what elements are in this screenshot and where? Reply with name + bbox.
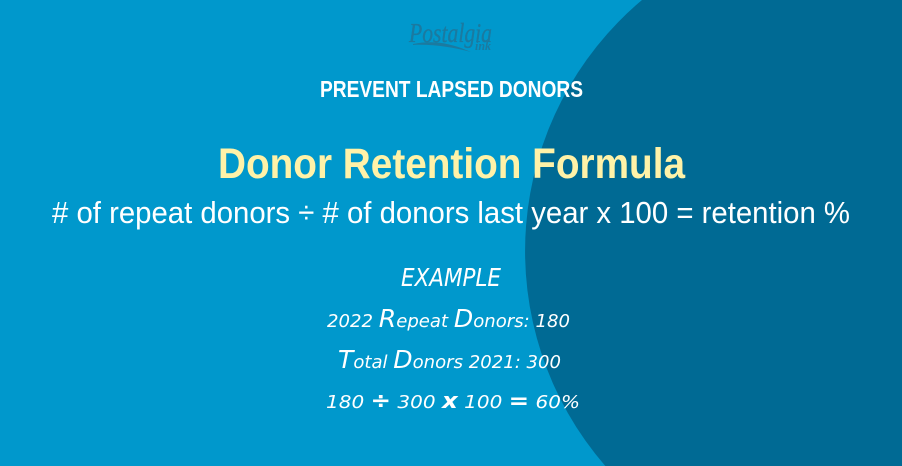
logo: Postalgia ink: ink <box>475 38 491 53</box>
example block <box>326 263 580 414</box>
example line: total donors: Total Donors 2021: 300 <box>338 345 561 374</box>
title: donor retention formula: Donor Retention Formula <box>218 140 686 188</box>
formula text: # of repeat donors ÷ # of donors last year x 100 = retention % <box>52 195 850 230</box>
heading: prevent lapsed donors: PREVENT LAPSED DONORS <box>320 76 583 102</box>
logo: Postalgia ink: Postalgia <box>408 18 492 48</box>
example line: calculation: 180 ÷ 300 x 100 = 60% <box>326 389 580 414</box>
example label: EXAMPLE <box>401 263 501 292</box>
example line: repeat donors: 2022 Repeat Donors: 180 <box>327 304 570 333</box>
dark circle panel <box>525 0 902 466</box>
